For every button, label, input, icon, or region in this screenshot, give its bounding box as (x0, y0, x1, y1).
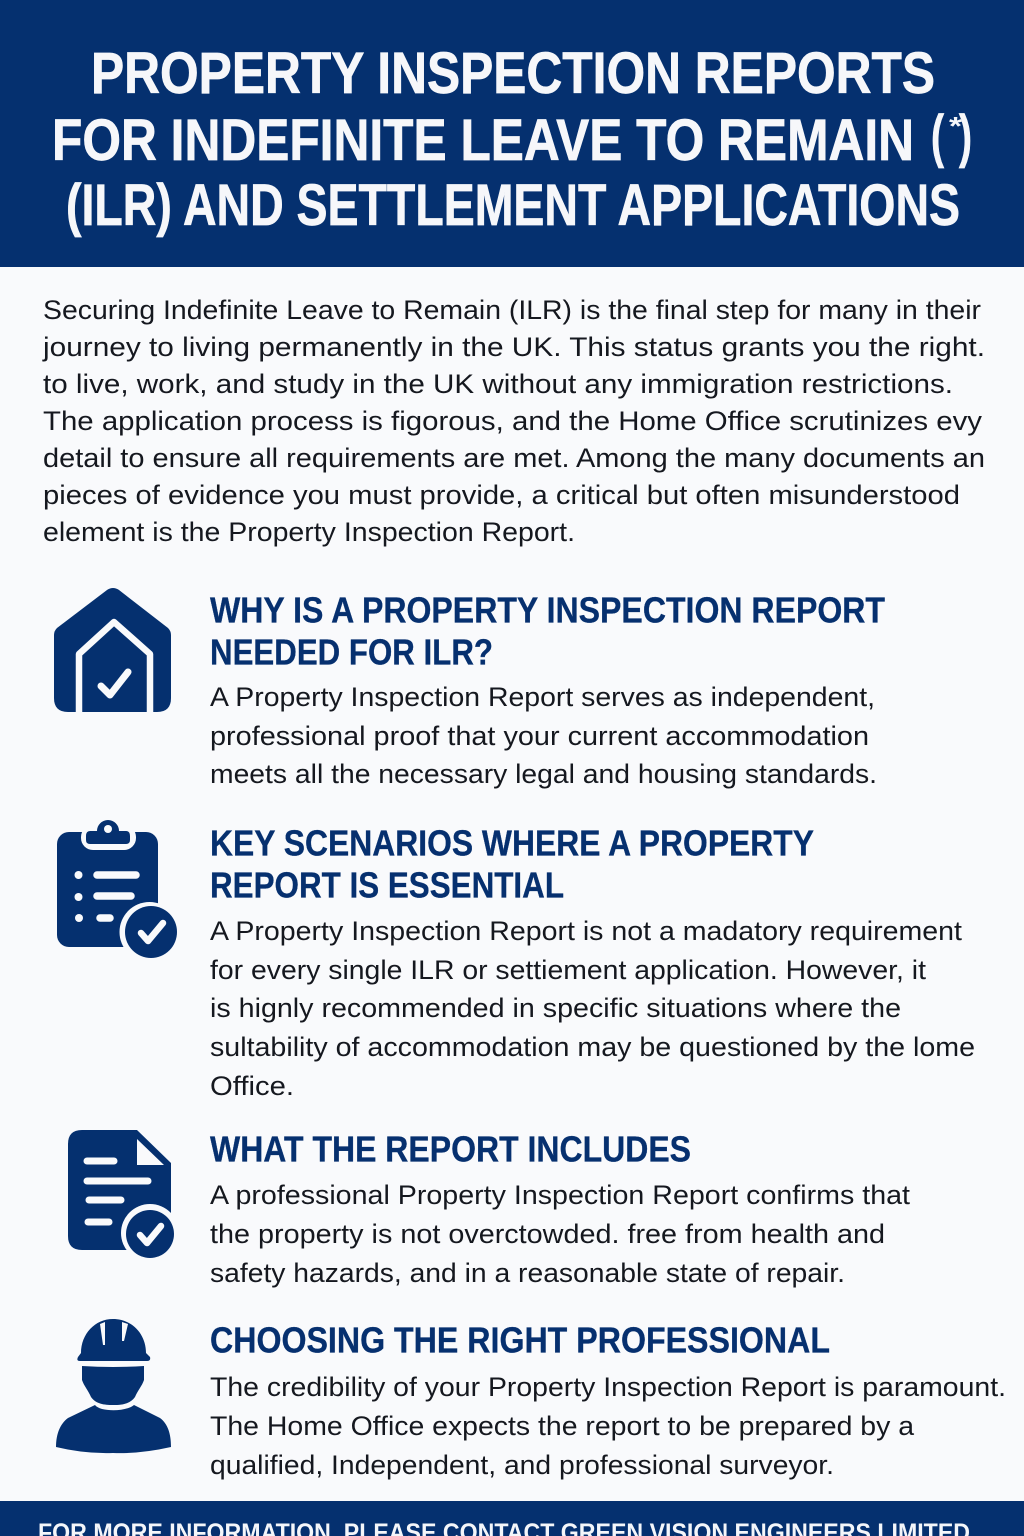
body: what the report includes: the property is not overctowded. free from health and (210, 1219, 885, 1249)
heading: choosing the right professional: CHOOSING THE RIGHT PROFESSIONAL (210, 1320, 830, 1360)
heading: key scenarios (210, 822, 814, 906)
header banner (0, 0, 1024, 267)
icon: worker with hard hat (56, 1319, 171, 1453)
section: key scenarios (210, 822, 975, 1101)
body: key scenarios: sultability of accommodation may be questioned by the lome (210, 1032, 975, 1062)
body: choosing the right professional (210, 1372, 1006, 1480)
intro paragraph: The application process is figorous, and the Home Office scrutinizes evy (43, 406, 983, 436)
icon: clipboard with check (57, 820, 180, 962)
heading: why needed: NEEDED FOR ILR? (210, 632, 493, 672)
intro paragraph: element is the Property Inspection Report. (43, 517, 575, 547)
icon: document with check (68, 1130, 179, 1262)
heading: key scenarios: REPORT IS ESSENTIAL (210, 864, 564, 906)
heading: key scenarios: KEY SCENARIOS WHERE A PROPERTY (210, 822, 814, 864)
heading: why needed (210, 590, 885, 672)
intro paragraph: to live, work, and study in the UK without any immigration restrictions. (43, 369, 953, 399)
heading: why needed: WHY IS A PROPERTY INSPECTION REPORT (210, 590, 885, 630)
body: what the report includes: A professional Property Inspection Report confirms that (210, 1180, 911, 1210)
section: choosing the right professional (210, 1320, 1006, 1480)
title: * (949, 111, 963, 141)
body: key scenarios (210, 916, 975, 1101)
body: why needed: A Property Inspection Report serves as independent, (210, 682, 875, 712)
title: ( (931, 104, 944, 169)
body: what the report includes: safety hazards, and in a reasonable state of repair. (210, 1258, 845, 1288)
body: key scenarios: Office. (210, 1071, 294, 1101)
icon: house with check (54, 588, 171, 712)
body: why needed: meets all the necessary legal and housing standards. (210, 759, 877, 789)
body: why needed: professional proof that your current accommodation (210, 721, 869, 751)
body: why needed (210, 682, 877, 789)
body: key scenarios: for every single ILR or settiement application. However, it (210, 955, 927, 985)
intro paragraph: journey to living permanently in the UK. This status grants you the right. (42, 332, 985, 362)
section: what the report includes (210, 1128, 911, 1288)
intro paragraph (42, 295, 985, 547)
body: what the report includes (210, 1180, 911, 1288)
footer banner (0, 1501, 1024, 1536)
title (52, 41, 972, 238)
intro paragraph: Securing Indefinite Leave to Remain (ILR) is the final step for many in their (43, 295, 981, 325)
title: ) (959, 104, 972, 169)
body: choosing the right professional: qualified, Independent, and professional surveyor. (210, 1450, 834, 1480)
body: key scenarios: is hignly recommended in specific situations where the (210, 993, 901, 1023)
body: choosing the right professional: The Home Office expects the report to be prepared by a (210, 1411, 915, 1441)
heading: what the report includes: WHAT THE REPORT INCLUDES (210, 1128, 691, 1170)
body: choosing the right professional: The credibility of your Property Inspection Report is paramount. (210, 1372, 1006, 1402)
section: why needed (210, 590, 885, 789)
intro paragraph: detail to ensure all requirements are met. Among the many documents an (43, 443, 985, 473)
intro paragraph: pieces of evidence you must provide, a critical but often misunderstood (43, 480, 960, 510)
body: key scenarios: A Property Inspection Report is not a madatory requirement (210, 916, 963, 946)
